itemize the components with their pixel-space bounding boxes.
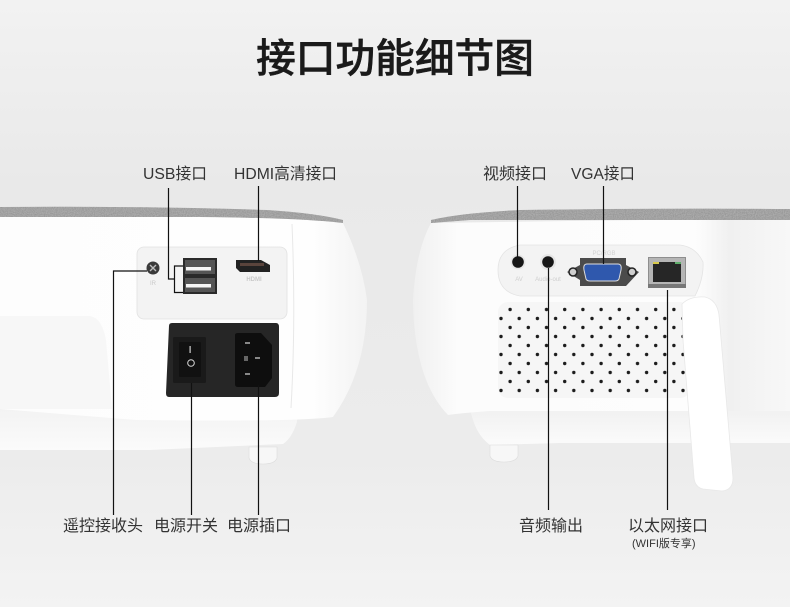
label: power socket: 电源插口 <box>227 517 291 535</box>
label: IR receiver: 遥控接收头 <box>63 517 143 535</box>
port recess <box>137 247 287 319</box>
rubber foot <box>490 445 518 462</box>
rubber foot <box>249 447 277 464</box>
label: power switch: 电源开关 <box>154 517 218 535</box>
panel: right projector view <box>413 209 790 491</box>
label: audio output: 音频输出 <box>519 517 583 535</box>
VGA port: PC/RGB <box>592 251 616 257</box>
projector body <box>0 216 367 421</box>
projector body <box>413 218 790 415</box>
IR receiver <box>146 262 160 287</box>
IR receiver: IR <box>150 281 157 287</box>
AV jack <box>510 254 526 283</box>
handle strap <box>682 297 733 491</box>
audio jack: Audio-out <box>535 277 561 283</box>
port recess <box>498 245 703 296</box>
USB ports <box>183 258 217 294</box>
projector underside <box>470 410 790 445</box>
label: video: 视频接口 <box>483 165 547 183</box>
HDMI port: HDMI <box>246 277 262 283</box>
lens recess shape <box>0 316 112 409</box>
seam <box>291 224 294 408</box>
HDMI port <box>236 260 270 283</box>
label: VGA: VGA接口 <box>571 165 635 183</box>
label: HDMI: HDMI高清接口 <box>234 165 337 183</box>
title: 接口功能细节图 <box>256 37 534 81</box>
label: USB: USB接口 <box>143 165 207 183</box>
audio jack <box>535 254 561 283</box>
label: wifi version note: (WIFI版专享) <box>632 536 696 550</box>
power panel <box>166 323 279 397</box>
VGA port <box>567 251 639 286</box>
label: ethernet: 以太网接口 <box>628 517 708 535</box>
fabric top <box>431 209 790 223</box>
ethernet port <box>648 257 686 288</box>
AV jack: AV <box>515 277 523 283</box>
panel: left projector view <box>0 207 367 464</box>
fabric top <box>0 207 343 223</box>
callout lines <box>114 186 668 515</box>
projector underside <box>0 400 298 450</box>
speaker grille <box>498 302 690 398</box>
power switch <box>173 337 206 383</box>
power socket <box>235 333 272 387</box>
